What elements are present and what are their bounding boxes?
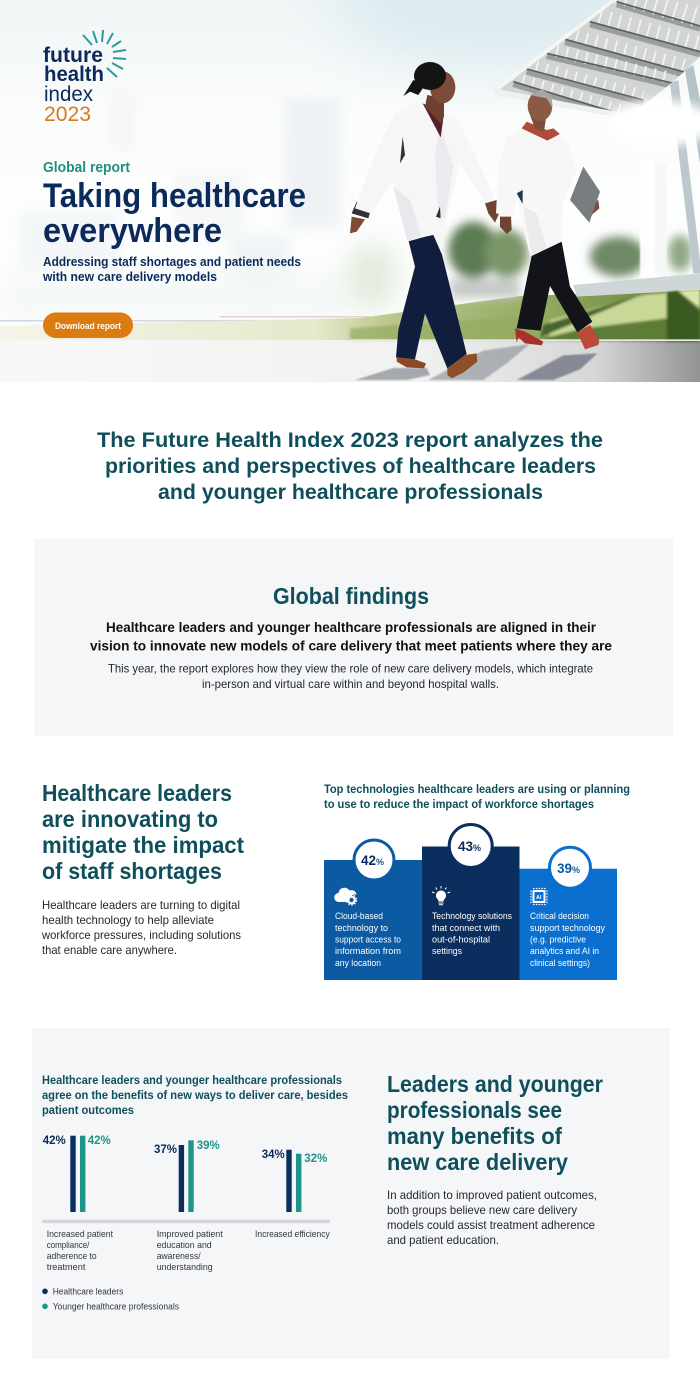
- axis label: compliance: [47, 1229, 113, 1273]
- section heading: benefits: many benefits of: [387, 1123, 562, 1149]
- intro heading: and younger healthcare professionals: [158, 481, 543, 504]
- card text: that connect with: [432, 923, 500, 934]
- badge 39%: 39%: [557, 861, 580, 876]
- ground: grass and pavement: [0, 290, 700, 382]
- section heading: staff shortages: Healthcare leaders: [42, 780, 232, 806]
- global findings key message: Healthcare leaders and younger healthcare professionals are aligned in their: [106, 619, 597, 635]
- legend: [42, 1286, 179, 1312]
- section heading: staff shortages: [42, 780, 244, 884]
- legend: Younger healthcare professionals: [53, 1302, 179, 1312]
- icon: light bulb: [432, 886, 450, 905]
- card text: analytics and AI in: [530, 946, 599, 957]
- card text: [432, 911, 512, 957]
- photo: two healthcare professionals walking under a canopy: [350, 0, 700, 380]
- section heading: benefits: new care delivery: [387, 1149, 568, 1175]
- figure: doctor on the right: [496, 89, 600, 349]
- section heading: staff shortages: mitigate the impact: [42, 832, 244, 858]
- card text: settings: [432, 946, 462, 957]
- logo wordmark: future: [43, 44, 103, 67]
- axis label: efficiency: Increased efficiency: [255, 1229, 330, 1240]
- logo wordmark: [43, 44, 104, 126]
- axis label: education: Improved patient: [157, 1229, 223, 1240]
- bar group: increased efficiency: 32%: [304, 1153, 327, 1165]
- hero title: Taking healthcare: [43, 177, 306, 215]
- axis label: compliance: treatment: [47, 1262, 86, 1273]
- logo: future health index 2023: [43, 30, 126, 126]
- card text: Critical decision: [530, 911, 589, 922]
- hero report label: Global report: [43, 160, 130, 176]
- hero title: everywhere: [43, 212, 222, 250]
- section heading: benefits: [387, 1071, 603, 1175]
- axis label: education: education and: [157, 1240, 212, 1251]
- global findings key message: [90, 619, 612, 654]
- benefits text: both groups believe new care delivery: [387, 1203, 577, 1217]
- pavement edge: [350, 339, 700, 341]
- card text: clinical settings): [530, 958, 590, 969]
- icon: AI chip: AI: [536, 895, 542, 901]
- staff shortages text: Healthcare leaders are turning to digital: [42, 898, 240, 912]
- card text: Technology solutions: [432, 911, 512, 922]
- axis label: compliance: compliance/: [47, 1240, 90, 1251]
- logo wordmark: index: [44, 83, 93, 106]
- canopy roof: [490, 0, 700, 120]
- bar group: increased compliance: 42%: [43, 1135, 66, 1147]
- bar group: improved education: 39%: [197, 1140, 220, 1152]
- card text: [530, 911, 605, 969]
- card text: technology to: [335, 923, 388, 934]
- section heading: staff shortages: are innovating to: [42, 806, 218, 832]
- axis label: compliance: Increased patient: [47, 1229, 113, 1240]
- section heading: benefits: professionals see: [387, 1097, 562, 1123]
- panel: global findings: [34, 539, 673, 736]
- bar group: improved education: 37%: [154, 1144, 177, 1156]
- figure: doctor on the left: [350, 62, 500, 378]
- global findings description: [108, 662, 593, 691]
- sky tint: [330, 0, 670, 70]
- canopy pillars: [573, 65, 700, 297]
- benefits text: models could assist treatment adherence: [387, 1218, 595, 1232]
- badge 43%: 43%: [458, 839, 481, 854]
- logo wordmark: 2023: [44, 103, 91, 126]
- benefits text: [387, 1188, 597, 1247]
- bar group: increased efficiency: 34%: [262, 1149, 285, 1161]
- card: cloud-based technology 42%: [324, 840, 422, 980]
- bar group: increased efficiency: [262, 1149, 327, 1212]
- panel background: [34, 539, 673, 736]
- blurred trees: [448, 222, 692, 298]
- chart title: benefits: patient outcomes: [42, 1105, 134, 1117]
- section heading: staff shortages: of staff shortages: [42, 858, 222, 884]
- chart title: top technologies: [324, 784, 630, 811]
- card: out-of-hospital solutions 43%: [422, 824, 520, 980]
- logo wordmark: health: [44, 63, 104, 86]
- chart title: benefits: [42, 1075, 348, 1117]
- global findings description: This year, the report explores how they view the role of new care delivery models, which integrate: [108, 662, 593, 676]
- intro heading: The Future Health Index 2023 report analyzes the: [97, 429, 603, 452]
- bar group: increased compliance: 42%: [88, 1135, 111, 1147]
- staff shortages text: that enable care anywhere.: [42, 943, 177, 957]
- walking shadows on pavement: [355, 344, 597, 380]
- global findings description: in-person and virtual care within and beyond hospital walls.: [202, 677, 499, 691]
- card text: [335, 911, 401, 969]
- legend: Healthcare leaders: [53, 1286, 124, 1298]
- benefits text: and patient education.: [387, 1233, 499, 1247]
- intro heading: priorities and perspectives of healthcare leaders: [105, 455, 596, 478]
- card text: support technology: [530, 923, 605, 934]
- axis label: education: understanding: [157, 1262, 213, 1273]
- card text: (e.g. predictive: [530, 934, 586, 946]
- download button: [43, 312, 133, 338]
- bar group: improved education: [154, 1140, 220, 1212]
- chart title: benefits: agree on the benefits of new ways to deliver care, besides: [42, 1090, 348, 1102]
- intro heading: [97, 429, 603, 504]
- staff shortages text: [41, 898, 241, 957]
- panel: benefits chart: [32, 1028, 670, 1359]
- axis label: education: [157, 1229, 223, 1273]
- blurred city backdrop: [0, 92, 397, 320]
- icon: cloud with gear: [334, 888, 356, 905]
- staff shortages text: workforce pressures, including solutions: [41, 928, 241, 942]
- hero banner: [0, 0, 700, 382]
- card text: information from: [335, 946, 401, 957]
- badge 42%: 42%: [361, 853, 384, 868]
- axis label: education: awareness/: [157, 1251, 201, 1262]
- sunlit grass and shadows: [350, 289, 700, 342]
- staff shortages text: health technology to help alleviate: [42, 913, 214, 927]
- chart axis: [42, 1220, 330, 1223]
- chart title: top technologies: Top technologies healthcare leaders are using or planning: [324, 784, 630, 796]
- benefits text: In addition to improved patient outcomes,: [387, 1188, 597, 1202]
- global findings heading: Global findings: [273, 583, 429, 609]
- chart title: top technologies: to use to reduce the impact of workforce shortages: [324, 799, 594, 811]
- hero subtitle: [42, 254, 301, 284]
- hero subtitle: with new care delivery models: [42, 269, 217, 284]
- card text: Cloud-based: [335, 911, 383, 922]
- global findings key message: vision to innovate new models of care delivery that meet patients where they are: [90, 638, 612, 654]
- panel background: [32, 1028, 670, 1359]
- hero subtitle: Addressing staff shortages and patient needs: [43, 254, 301, 269]
- hero sky background: [0, 0, 700, 72]
- logo sun rays: [83, 30, 126, 77]
- card text: out-of-hospital: [432, 934, 490, 946]
- bar group: increased compliance: [43, 1135, 111, 1212]
- card: critical decision support 39%: [520, 847, 617, 980]
- badge 43%: [449, 824, 492, 868]
- download button: Download report: [55, 321, 122, 332]
- card text: any location: [335, 958, 381, 969]
- chart title: benefits: Healthcare leaders and younger healthcare professionals: [42, 1075, 342, 1087]
- axis label: compliance: adherence to: [47, 1251, 97, 1262]
- card text: support access to: [335, 934, 401, 946]
- section heading: benefits: Leaders and younger: [387, 1071, 603, 1097]
- hero title: [43, 177, 306, 250]
